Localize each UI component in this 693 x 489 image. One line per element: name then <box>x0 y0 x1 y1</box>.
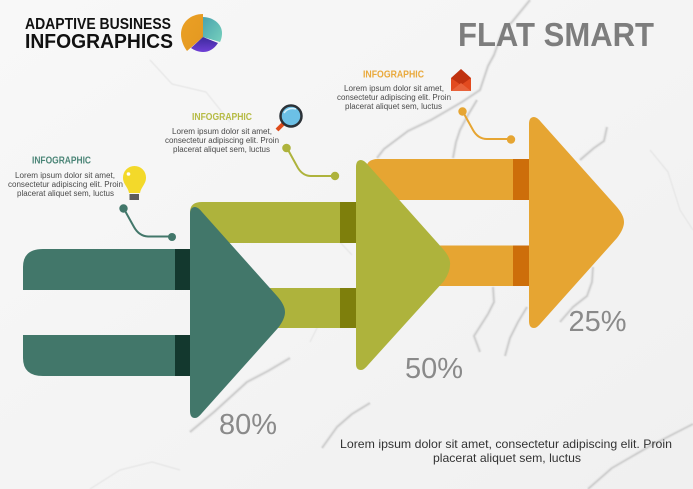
text block: footer <box>340 437 672 465</box>
logo title: ADAPTIVE BUSINESS <box>25 16 171 33</box>
callout: olive: consectetur adipiscing elit. Proin <box>165 136 279 145</box>
icon: magnifying glass <box>277 106 302 130</box>
callout: orange: Lorem ipsum dolor sit amet, <box>344 84 444 93</box>
icon: light bulb <box>123 166 146 200</box>
logo title: INFOGRAPHICS <box>25 31 173 53</box>
callout: teal: consectetur adipiscing elit. Proin <box>8 180 123 189</box>
connector: olive <box>282 144 339 180</box>
callout: teal: Lorem ipsum dolor sit amet, <box>15 171 115 180</box>
percentage: 50%: 50% <box>405 353 463 385</box>
callout: olive <box>165 111 279 154</box>
text block: footer: Lorem ipsum dolor sit amet, consectetur adipiscing elit. Proin <box>340 437 672 451</box>
olive arrow <box>190 160 450 370</box>
callout: teal: INFOGRAPHIC <box>32 154 91 166</box>
teal arrow <box>23 207 285 418</box>
icon: envelope <box>451 69 471 91</box>
connector: orange <box>458 107 515 144</box>
callout: olive: Lorem ipsum dolor sit amet, <box>172 127 272 136</box>
callout: orange: INFOGRAPHIC <box>363 68 424 80</box>
connector: teal <box>119 204 176 241</box>
orange arrow <box>366 117 624 328</box>
callout: teal <box>8 154 123 198</box>
percentage: 25%: 25% <box>568 306 627 338</box>
percentage: 80%: 80% <box>219 409 277 441</box>
callout: orange <box>337 68 451 111</box>
callout: olive: placerat aliquet sem, luctus <box>173 145 270 154</box>
logo title <box>25 16 173 53</box>
title: FLAT SMART: FLAT SMART <box>458 16 654 53</box>
callout: olive: INFOGRAPHIC <box>192 111 252 123</box>
callout: orange: placerat aliquet sem, luctus <box>345 102 442 111</box>
icon: logo pie chart <box>181 14 222 52</box>
text block: footer: placerat aliquet sem, luctus <box>433 451 581 465</box>
callout: orange: consectetur adipiscing elit. Proin <box>337 93 451 102</box>
callout: teal: placerat aliquet sem, luctus <box>17 189 114 198</box>
